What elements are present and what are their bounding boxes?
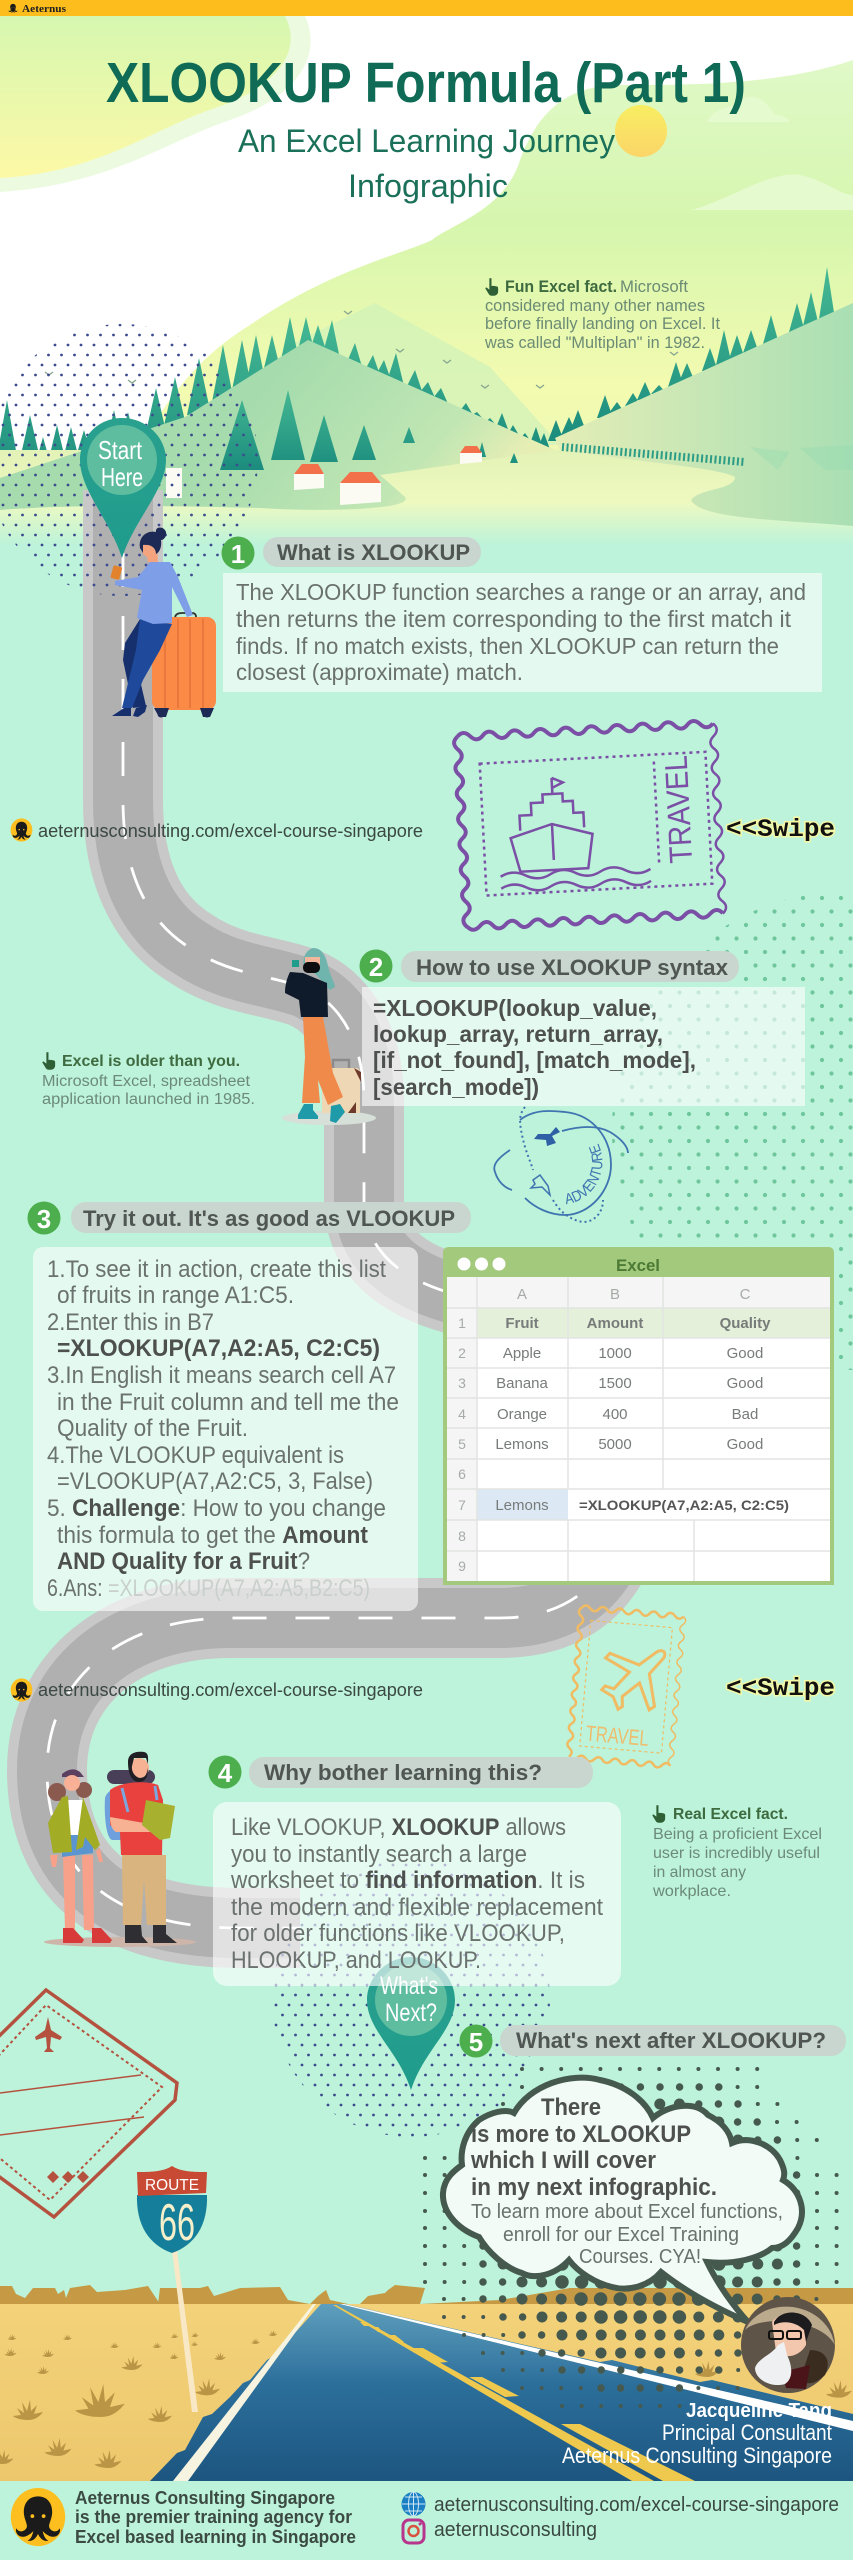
top bar with logo: Aeternus bbox=[22, 3, 67, 15]
section 3 steps panel: 6.Ans: =XLOOKUP(A7,A2:A5,B2:C5) bbox=[47, 1575, 370, 1602]
hills bbox=[0, 340, 555, 510]
section 2 header: 2 bbox=[369, 952, 383, 982]
author credit: Jacqueline Tang bbox=[686, 2400, 832, 2422]
section 3 steps panel: 4.The VLOOKUP equivalent is bbox=[47, 1442, 344, 1469]
excel spreadsheet window: =XLOOKUP(A7,A2:A5, C2:C5) bbox=[579, 1497, 789, 1513]
section 5 header: 5 bbox=[469, 2027, 483, 2057]
section 4 text panel: HLOOKUP, and LOOKUP. bbox=[231, 1947, 481, 1974]
title: XLOOKUP Formula (Part 1) bbox=[106, 51, 746, 115]
subtitle: Infographic bbox=[348, 168, 508, 204]
excel spreadsheet window: Bad bbox=[732, 1406, 758, 1423]
start here pin: Start bbox=[98, 435, 143, 465]
section 4 text panel bbox=[213, 1802, 621, 1986]
speech bubble: Courses. CYA! bbox=[579, 2246, 701, 2268]
what's next pin: What's bbox=[380, 1972, 438, 2000]
what's next pin bbox=[367, 1957, 455, 2090]
foreground trees bbox=[220, 390, 518, 470]
footer company description: is the premier training agency for bbox=[75, 2507, 352, 2527]
author credit: Principal Consultant bbox=[662, 2420, 832, 2445]
fun excel fact: considered many other names bbox=[485, 296, 705, 315]
excel spreadsheet window: 5 bbox=[458, 1436, 466, 1452]
section 2 syntax panel: [if_not_found], [match_mode], bbox=[373, 1047, 696, 1073]
section 1 text panel: The XLOOKUP function searches a range or an array, and bbox=[236, 579, 806, 605]
section 1 header: What is XLOOKUP bbox=[277, 540, 470, 565]
excel spreadsheet window: Banana bbox=[496, 1375, 549, 1392]
section 3 steps panel: 5. Challenge: How to you change bbox=[47, 1495, 386, 1522]
footer company description: Excel based learning in Singapore bbox=[75, 2527, 356, 2547]
speech bubble: enroll for our Excel Training bbox=[503, 2224, 739, 2246]
footer links: aeternusconsulting.com/excel-course-singapore bbox=[434, 2494, 839, 2516]
section 4 text panel: Like VLOOKUP, XLOOKUP allows bbox=[231, 1814, 566, 1841]
excel spreadsheet window: 7 bbox=[458, 1497, 466, 1513]
route 66 sign bbox=[137, 2166, 207, 2412]
excel spreadsheet window: Quality bbox=[720, 1315, 771, 1332]
section 3 steps panel: 2.Enter this in B7 bbox=[47, 1309, 214, 1336]
small distant tree line bbox=[562, 447, 745, 462]
website link 2: aeternusconsulting.com/excel-course-singapore bbox=[38, 1680, 423, 1700]
excel spreadsheet window: Lemons bbox=[495, 1497, 549, 1514]
excel is older fact bbox=[42, 1052, 255, 1108]
section 4 text panel: worksheet to find information. It is bbox=[230, 1867, 585, 1894]
section 2 header: How to use XLOOKUP syntax bbox=[416, 955, 729, 980]
fun excel fact bbox=[484, 277, 720, 352]
birds bbox=[45, 311, 678, 388]
footer links: aeternusconsulting bbox=[434, 2519, 597, 2541]
fun excel fact: Microsoft bbox=[620, 277, 688, 296]
start here pin bbox=[80, 418, 166, 558]
footer company description bbox=[75, 2488, 356, 2547]
speech bubble: To learn more about Excel functions, bbox=[471, 2201, 783, 2223]
start here pin: Here bbox=[101, 462, 143, 492]
excel spreadsheet window: C bbox=[740, 1286, 751, 1303]
section 3 steps panel: 1.To see it in action, create this list bbox=[47, 1256, 386, 1283]
real excel fact: in almost any bbox=[653, 1864, 746, 1881]
website link 1: aeternusconsulting.com/excel-course-singapore bbox=[38, 821, 423, 841]
subtitle: An Excel Learning Journey bbox=[238, 123, 615, 159]
speech bubble: which I will cover bbox=[470, 2147, 656, 2174]
excel is older fact: Excel is older than you. bbox=[62, 1053, 240, 1070]
section 2 syntax panel: =XLOOKUP(lookup_value, bbox=[373, 995, 657, 1021]
section 3 steps panel: Quality of the Fruit. bbox=[57, 1415, 248, 1442]
route 66 sign: 66 bbox=[159, 2194, 195, 2252]
subtitle bbox=[238, 123, 615, 204]
section 5 header: What's next after XLOOKUP? bbox=[516, 2028, 826, 2053]
real excel fact bbox=[652, 1805, 822, 1900]
section 3 steps panel: this formula to get the Amount bbox=[57, 1522, 368, 1549]
travel stamp, plane, orange: TRAVEL bbox=[585, 1721, 650, 1751]
real excel fact: user is incredibly useful bbox=[653, 1845, 820, 1862]
author credit bbox=[562, 2400, 832, 2468]
travel stamp, ship, purple bbox=[454, 720, 727, 930]
footer company description: Aeternus Consulting Singapore bbox=[75, 2488, 335, 2508]
excel spreadsheet window: 400 bbox=[602, 1406, 628, 1423]
excel spreadsheet window bbox=[443, 1247, 834, 1585]
excel spreadsheet window: Amount bbox=[587, 1315, 643, 1332]
real excel fact: Being a proficient Excel bbox=[653, 1826, 822, 1843]
excel spreadsheet window: A bbox=[517, 1286, 527, 1303]
section 3 steps panel: in the Fruit column and tell me the bbox=[57, 1389, 399, 1416]
top bar with logo bbox=[0, 0, 853, 16]
section 3 steps panel: =XLOOKUP(A7,A2:A5, C2:C5) bbox=[57, 1335, 380, 1362]
section 1 text panel: then returns the item corresponding to the first match it bbox=[236, 606, 792, 632]
section 1 header: 1 bbox=[231, 539, 245, 569]
excel spreadsheet window: 4 bbox=[458, 1406, 466, 1422]
speech bubble: is more to XLOOKUP bbox=[471, 2121, 691, 2148]
section 3 steps panel: =VLOOKUP(A7,A2:C5, 3, False) bbox=[57, 1468, 373, 1495]
adventure stamp, blue: ADVENTURE bbox=[566, 1144, 602, 1204]
section 4 header bbox=[208, 1756, 593, 1788]
halftone dots behind speech bubble bbox=[425, 2069, 837, 2406]
section 3 steps panel: 3.In English it means search cell A7 bbox=[47, 1362, 396, 1389]
section 1 text panel bbox=[223, 573, 822, 692]
couple with map bbox=[44, 1752, 196, 1947]
section 3 steps panel bbox=[33, 1247, 418, 1611]
brown luggage tag stamp bbox=[0, 1990, 177, 2217]
excel spreadsheet window: Apple bbox=[503, 1345, 541, 1362]
fun excel fact: Fun Excel fact. bbox=[505, 277, 617, 296]
excel spreadsheet window: Good bbox=[727, 1375, 763, 1392]
section 4 text panel: for older functions like VLOOKUP, bbox=[231, 1920, 565, 1947]
footer links bbox=[402, 2492, 839, 2543]
excel spreadsheet window: Orange bbox=[497, 1406, 547, 1423]
section 2 syntax panel bbox=[362, 987, 805, 1106]
footer logo bbox=[11, 2488, 65, 2546]
section 3 steps panel: of fruits in range A1:C5. bbox=[57, 1282, 294, 1309]
excel spreadsheet window: 9 bbox=[458, 1558, 466, 1574]
excel spreadsheet window: 5000 bbox=[598, 1436, 632, 1453]
excel spreadsheet window: 1 bbox=[458, 1315, 466, 1331]
dot circle behind start pin bbox=[0, 324, 258, 596]
traveller woman with suitcase bbox=[110, 528, 216, 718]
section 5 header bbox=[460, 2024, 846, 2058]
excel is older fact: Microsoft Excel, spreadsheet bbox=[42, 1073, 251, 1090]
excel spreadsheet window: 2 bbox=[458, 1345, 466, 1361]
speech bubble: There bbox=[541, 2094, 601, 2121]
speech bubble bbox=[443, 2078, 802, 2322]
desert plants bbox=[0, 2330, 852, 2468]
swipe hint 1: <<Swipe bbox=[726, 815, 835, 844]
section 3 header bbox=[28, 1202, 471, 1234]
speech bubble: in my next infographic. bbox=[471, 2174, 717, 2201]
excel is older fact: application launched in 1985. bbox=[42, 1091, 255, 1108]
sun bbox=[615, 105, 667, 157]
excel spreadsheet window: Fruit bbox=[505, 1315, 539, 1332]
section 3 header: Try it out. It's as good as VLOOKUP bbox=[83, 1206, 455, 1231]
road: winding journey path bbox=[47, 490, 625, 1928]
excel spreadsheet window: 1000 bbox=[598, 1345, 632, 1362]
real excel fact: Real Excel fact. bbox=[673, 1806, 788, 1823]
desert road landscape bbox=[0, 2285, 853, 2481]
author portrait bbox=[741, 2297, 835, 2393]
dot circle, green, right side bbox=[612, 890, 853, 1370]
section 3 header: 3 bbox=[37, 1204, 51, 1234]
section 2 header bbox=[360, 950, 739, 982]
houses bbox=[166, 446, 482, 505]
what's next pin: Next? bbox=[385, 1999, 437, 2027]
section 1 header bbox=[222, 536, 481, 570]
real excel fact: workplace. bbox=[652, 1883, 731, 1900]
section 1 text panel: finds. If no match exists, then XLOOKUP can return the bbox=[236, 633, 779, 659]
section 2 syntax panel: [search_mode]) bbox=[373, 1074, 539, 1100]
route 66 sign: ROUTE bbox=[145, 2177, 199, 2194]
section 4 text panel: the modern and flexible replacement bbox=[231, 1894, 603, 1921]
excel spreadsheet window: B bbox=[610, 1286, 620, 1303]
excel spreadsheet window: 6 bbox=[458, 1466, 466, 1482]
trees behind the ridges bbox=[0, 267, 835, 490]
excel spreadsheet window: 1500 bbox=[598, 1375, 632, 1392]
excel spreadsheet window: Good bbox=[727, 1345, 763, 1362]
section 4 header: 4 bbox=[218, 1758, 233, 1788]
excel spreadsheet window: Lemons bbox=[495, 1436, 549, 1453]
excel spreadsheet window: 3 bbox=[458, 1375, 466, 1391]
fun excel fact: before finally landing on Excel. It bbox=[485, 314, 720, 333]
traveller with camera and mask bbox=[282, 948, 376, 1125]
travel stamp, plane, orange bbox=[566, 1605, 686, 1769]
section 3 steps panel: AND Quality for a Fruit? bbox=[57, 1548, 310, 1575]
section 4 header: Why bother learning this? bbox=[264, 1760, 542, 1785]
swipe hint 2: <<Swipe bbox=[726, 1674, 835, 1703]
section 1 text panel: closest (approximate) match. bbox=[236, 659, 523, 685]
adventure stamp, blue bbox=[493, 1106, 629, 1223]
travel stamp, ship, purple: TRAVEL bbox=[658, 754, 699, 864]
section 4 text panel: you to instantly search a large bbox=[231, 1841, 527, 1868]
excel spreadsheet window: 8 bbox=[458, 1528, 466, 1544]
dot circle behind what's next pin bbox=[272, 1859, 550, 2137]
section 2 syntax panel: lookup_array, return_array, bbox=[373, 1021, 663, 1047]
excel spreadsheet window: Excel bbox=[616, 1256, 660, 1275]
fun excel fact: was called "Multiplan" in 1982. bbox=[484, 333, 705, 352]
excel spreadsheet window: Good bbox=[727, 1436, 763, 1453]
